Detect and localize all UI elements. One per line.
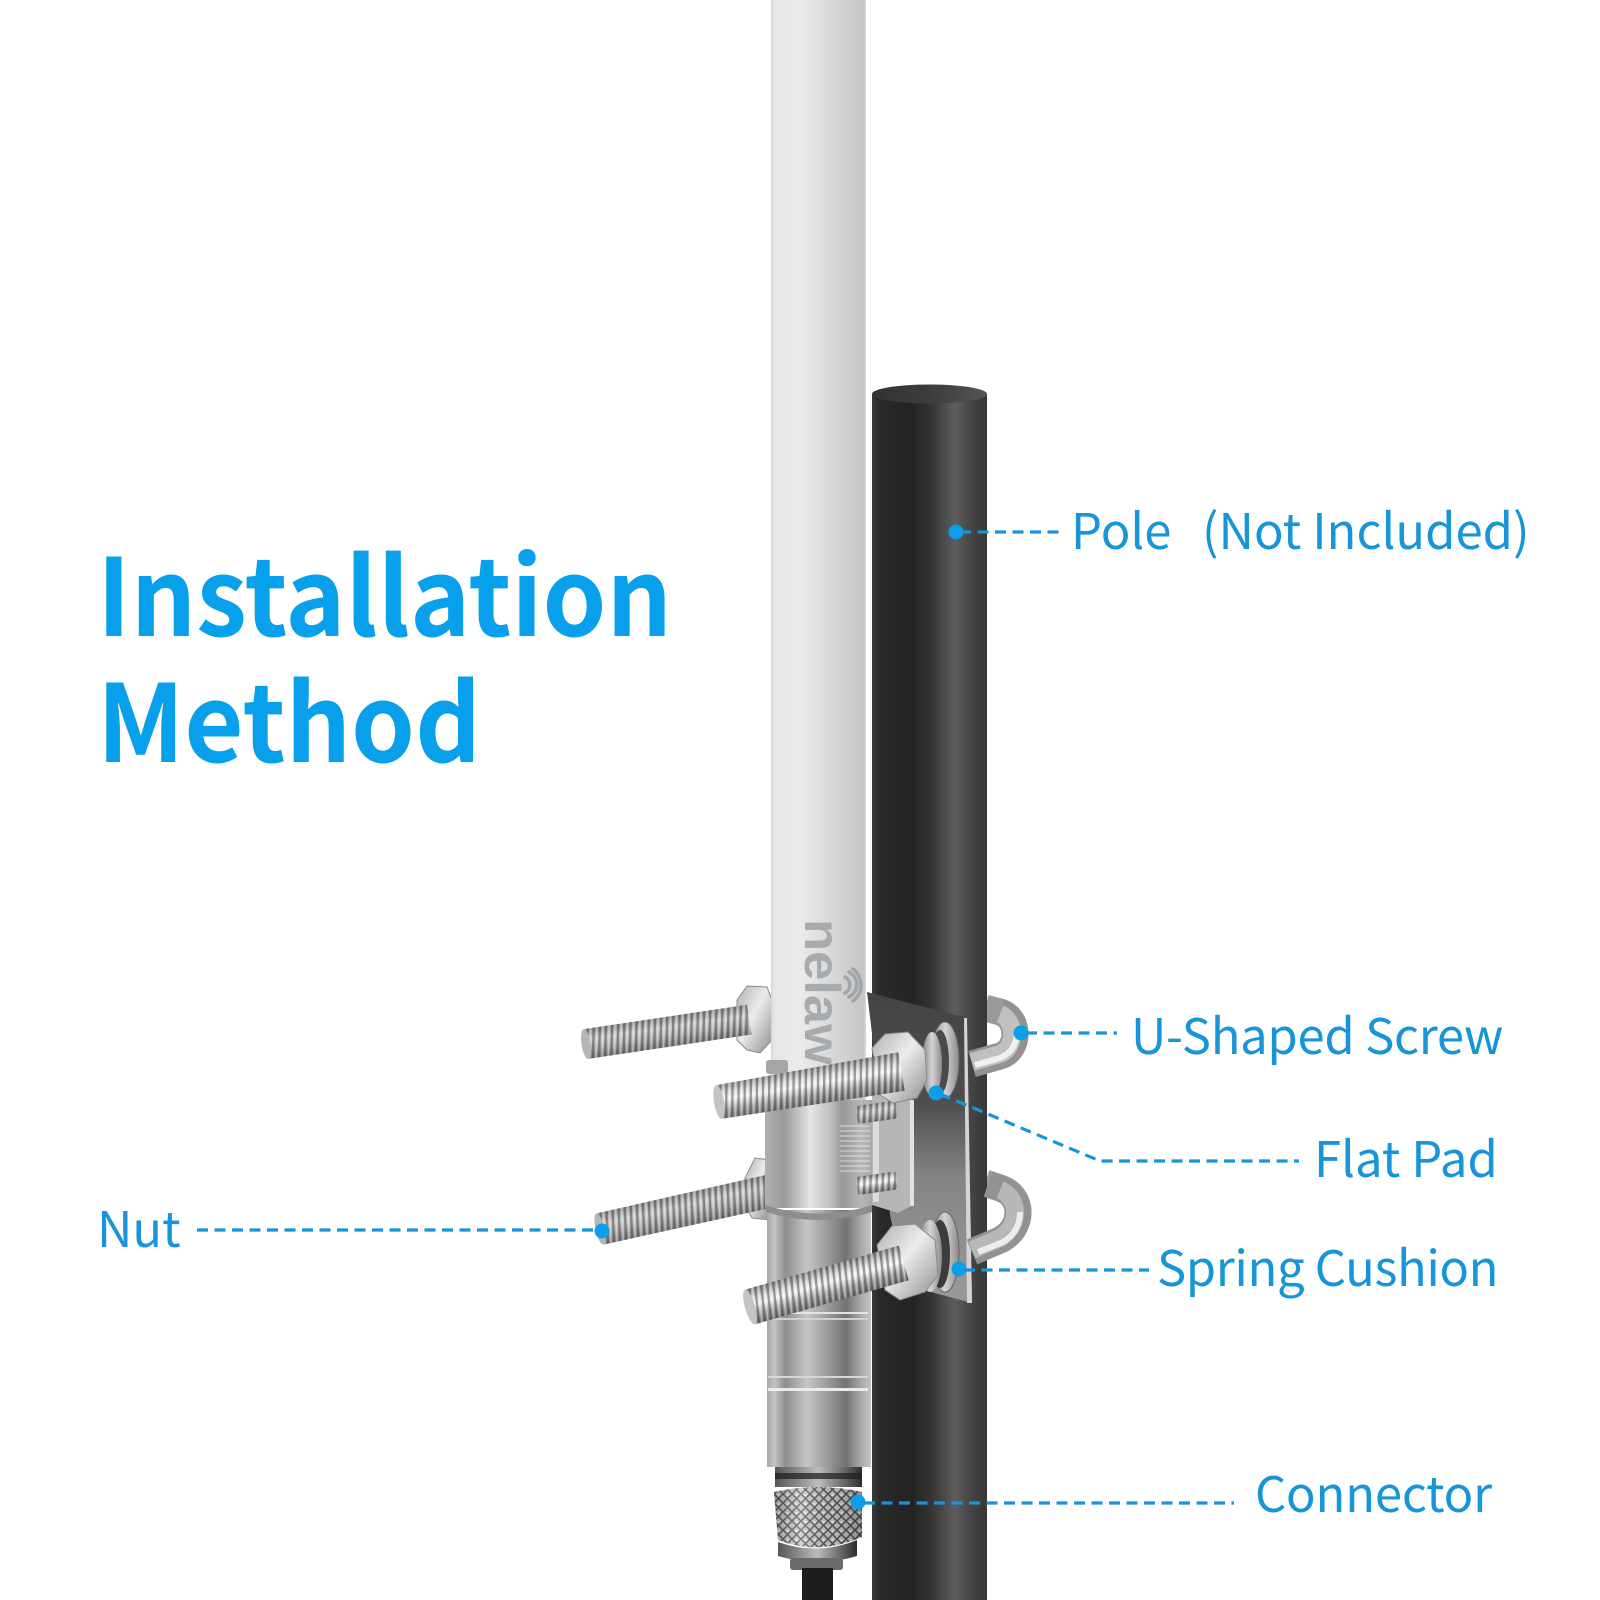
lower u-shaped screw, front arm [972, 1184, 1020, 1252]
upper front threaded bolt [711, 1052, 905, 1122]
upper nut [872, 1032, 927, 1103]
back nut behind lower left bolt [745, 1158, 770, 1220]
callout: flat pad: Flat Pad [1314, 1121, 1498, 1192]
small bracket screws [856, 1101, 898, 1195]
coax cable [802, 1568, 833, 1600]
icon: wifi waves [845, 969, 861, 1001]
antenna lower tube [767, 1210, 871, 1467]
pole clamp [765, 1100, 872, 1220]
callout: u-shaped screw: U-Shaped Screw [1131, 998, 1503, 1069]
knurled nut [774, 1487, 862, 1547]
lower nut [877, 1224, 938, 1300]
antenna radome (white) [771, 0, 866, 1100]
callout: spring cushion: Spring Cushion [1157, 1230, 1498, 1301]
upper u-shaped screw, front arm [972, 1012, 1017, 1065]
callout: nut [97, 1191, 610, 1262]
title: Method [97, 638, 481, 793]
callout: spring cushion [952, 1230, 1498, 1301]
tube rings [768, 1312, 868, 1391]
callout: nut: Nut [97, 1191, 181, 1262]
title [97, 512, 672, 793]
callout: pole [948, 493, 1530, 564]
antenna logo: nelaw [794, 919, 850, 1065]
callout: pole: Pole [1071, 493, 1171, 564]
callout: connector: Connector [1255, 1456, 1493, 1527]
bracket plate [867, 992, 972, 1303]
pole (black) [872, 384, 987, 1600]
callout: connector [850, 1456, 1493, 1527]
lower washer and spring cushion [918, 1212, 959, 1292]
upper u-shaped screw, back arm [985, 1008, 1015, 1056]
title: Installation [97, 512, 672, 667]
back nut and bolt: upper left [579, 986, 772, 1060]
callout: flat pad [928, 1086, 1498, 1192]
lower left threaded bolt [592, 1175, 773, 1246]
lower front threaded bolt [740, 1246, 909, 1326]
antenna logo [804, 922, 863, 1064]
upper washer and spring cushion [922, 1022, 959, 1098]
connector [774, 1467, 862, 1600]
lower u-shaped screw, back arm [985, 1183, 1018, 1240]
callout: pole: (Not Included) [1202, 493, 1530, 564]
small stub behind clamp [766, 1060, 788, 1074]
